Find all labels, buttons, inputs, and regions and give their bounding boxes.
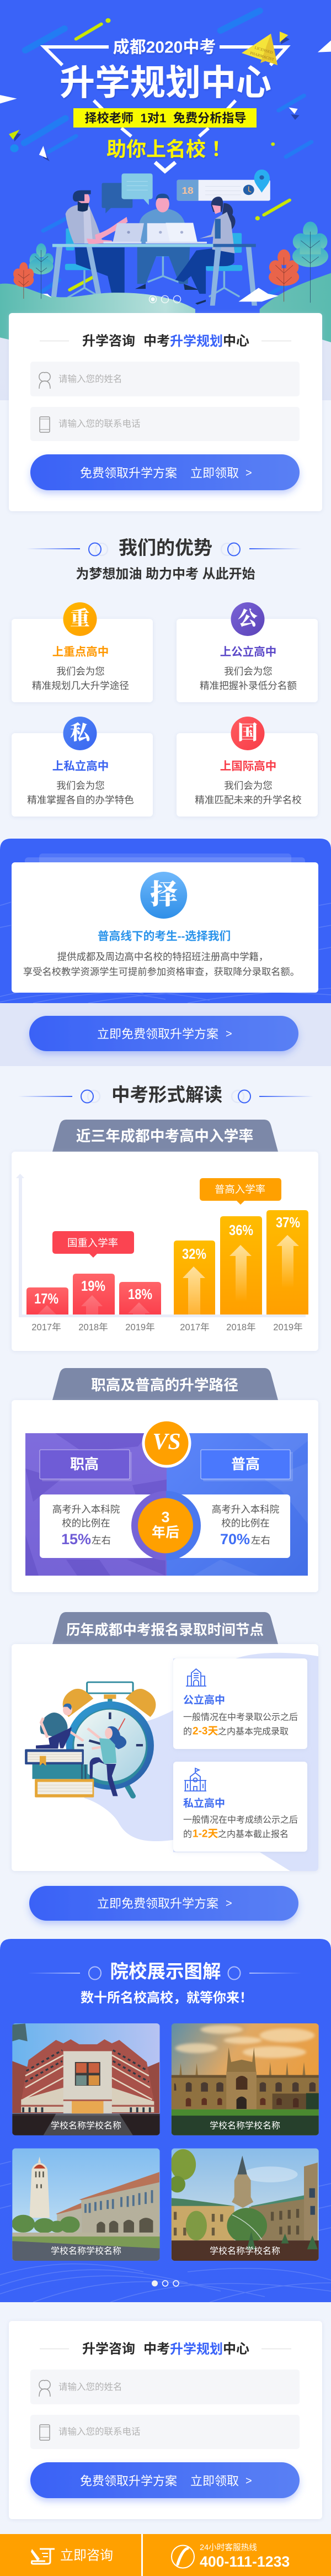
- tab: pathways: [52, 1368, 278, 1400]
- submit button: 立即领取: [190, 466, 239, 480]
- calendar card: [177, 180, 270, 201]
- icon: international: 国: [238, 722, 258, 744]
- panel text: 享受名校教学资源学生可提前参加资格审查，获取降分录取名额。: [23, 966, 300, 977]
- bar: 2018 key 19%: [73, 1274, 115, 1314]
- icon: private: [63, 717, 97, 750]
- vocational side background: [25, 1433, 167, 1576]
- hotline: 24小时客服热线: [200, 2543, 257, 2552]
- card: public high school: [177, 602, 318, 702]
- general result: 70%: [220, 1531, 250, 1547]
- carousel dots: [152, 2280, 179, 2287]
- icon: small plant left: [29, 243, 54, 299]
- submit button: [30, 454, 300, 490]
- submit button: 立即领取: [190, 2474, 239, 2488]
- icon: red plant right: [269, 250, 299, 301]
- card: international high school: 我们会为您: [224, 780, 273, 791]
- card: key high school: 上重点高中: [52, 645, 109, 658]
- card: public admission time: 的: [183, 1727, 192, 1737]
- person: bearded man: [66, 190, 128, 304]
- form heading: 升学咨询: [82, 2342, 135, 2356]
- label: general: 普高: [231, 1456, 260, 1472]
- general result: 校的比例在: [221, 1518, 270, 1529]
- photo: school three: 学校名称学校名称: [51, 2246, 121, 2256]
- icon: big plant right: [292, 221, 328, 303]
- bar: 2019 key 18%: 18%: [128, 1286, 152, 1302]
- name input: [30, 362, 300, 396]
- tab: enrolment rate: [52, 1120, 278, 1152]
- year labels: [31, 1322, 303, 1333]
- name input: [30, 2370, 300, 2404]
- bar: 2017 general 32%: 32%: [182, 1245, 206, 1262]
- card: key high school: 精准规划几大升学途径: [32, 680, 129, 691]
- vocational result: 高考升入本科院: [52, 1504, 120, 1515]
- card: public admission time: 之内基本完成录取: [218, 1727, 289, 1737]
- hero banner: [0, 0, 331, 342]
- button: get plan: 立即免费领取升学方案: [97, 1897, 218, 1910]
- phone input: [30, 407, 300, 441]
- card: private admission time: 一般情况在中考成绩公示之后: [183, 1815, 298, 1825]
- vocational result: 校的比例在: [62, 1518, 110, 1529]
- callout: key rate: [52, 1231, 134, 1258]
- subheading: 为梦想加油 助力中考 从此开始: [76, 566, 255, 582]
- form heading: 中考升学规划中心: [143, 2342, 249, 2356]
- heading: exam analysis: [18, 1085, 313, 1105]
- bar: 2018 general 36%: 36%: [229, 1222, 253, 1238]
- form heading: [82, 333, 249, 349]
- ring and three years later badge: 3: [161, 1509, 170, 1525]
- icon: pencil and scroll: [31, 2549, 55, 2564]
- yellow tagline band: [73, 108, 257, 128]
- books: [25, 1749, 94, 1798]
- icon: key: 重: [70, 607, 90, 629]
- button: get plan: [29, 1886, 298, 1921]
- person: woman: [175, 197, 236, 305]
- year labels: 2019年: [125, 1322, 155, 1333]
- down chevron: [155, 162, 175, 171]
- card: international high school: 精准匹配未来的升学名校: [195, 794, 302, 805]
- hotline: [200, 2543, 290, 2570]
- icon: public school building: [186, 1669, 206, 1686]
- hills: [0, 273, 331, 342]
- panel: below the cutoff: [0, 839, 331, 1003]
- submit button: 免费领取升学方案: [80, 466, 177, 480]
- icon: speech bubbles: [102, 173, 153, 213]
- card: private high school: 上私立高中: [52, 760, 109, 773]
- panel text: [23, 951, 300, 977]
- card: key high school: 我们会为您: [56, 666, 105, 677]
- card: private admission time: 之内基本截止报名: [218, 1830, 289, 1840]
- panel: consultation form repeat: [9, 2321, 322, 2519]
- button: get plan: 立即免费领取升学方案: [97, 1027, 218, 1041]
- card: private high school: 我们会为您: [56, 780, 105, 791]
- year labels: 2018年: [78, 1322, 108, 1333]
- heading: our advantages: [26, 538, 302, 559]
- callout: general rate: [200, 1178, 281, 1205]
- card: private admission time: [173, 1762, 307, 1852]
- ring and three years later badge: [131, 1491, 201, 1560]
- phone input: 请输入您的联系电话: [58, 2426, 140, 2437]
- heading: exam analysis: 中考形式解读: [111, 1085, 222, 1105]
- badge: licensed pharmacist: PHARMACIST: [249, 51, 275, 62]
- phone input: 请输入您的联系电话: [58, 418, 140, 429]
- card: international high school: 上国际高中: [220, 760, 276, 773]
- yellow tagline band: 择校老师 1对1 免费分析指导: [85, 112, 246, 125]
- person: student kneeling: [36, 1704, 83, 1748]
- photo: school four: [169, 2148, 319, 2261]
- panel: pathways comparison: [12, 1400, 318, 1592]
- vocational result: 15%: [61, 1531, 91, 1547]
- photo: school one: 学校名称学校名称: [51, 2121, 121, 2131]
- chart axes: [16, 1174, 306, 1317]
- icon: key: [63, 602, 97, 636]
- ring and three years later badge: 年后: [152, 1525, 179, 1540]
- card: public admission time: 一般情况在中考录取公示之后: [183, 1713, 298, 1722]
- general side background: [167, 1433, 308, 1576]
- card: public admission time: 公立高中: [183, 1694, 225, 1706]
- bar: 2017 key 17%: [26, 1287, 68, 1314]
- label: vocational: 职高: [70, 1456, 99, 1472]
- general result: [174, 1494, 290, 1558]
- bar: 2018 general 36%: [220, 1216, 262, 1314]
- icon: choose: 择: [150, 879, 178, 910]
- icon: red plant left: [13, 262, 34, 299]
- panel heading: 普高线下的考生--选择我们: [98, 930, 231, 943]
- panel: admission timeline: [12, 1644, 318, 1871]
- laptops: [103, 223, 207, 243]
- card: private admission time: 1-2天: [193, 1828, 218, 1840]
- gallery heading: 院校展示图解: [110, 1962, 221, 1982]
- icon: map pin: [254, 169, 270, 193]
- callout: general rate: 普高入学率: [215, 1184, 265, 1195]
- button: get plan: [29, 1016, 298, 1051]
- card: public high school: 精准把握补录低分名额: [200, 680, 297, 691]
- carousel dots: [149, 296, 181, 303]
- label: vocational: [40, 1450, 132, 1481]
- bar: 2019 general 37%: [266, 1210, 308, 1314]
- title frame: [44, 47, 287, 136]
- photo: school two: [172, 2023, 319, 2135]
- illustration: alarm clock and students: [25, 1682, 156, 1798]
- form heading: [82, 2342, 249, 2356]
- bar: 2017 general 32%: [174, 1241, 215, 1314]
- footer bar: [0, 2534, 331, 2576]
- year labels: 2019年: [273, 1322, 303, 1333]
- photo: school three: [12, 2148, 160, 2261]
- card: international high school: [177, 717, 318, 817]
- badge: versus: VS: [152, 1429, 181, 1455]
- general result: 高考升入本科院: [212, 1504, 279, 1515]
- heading: our advantages: 我们的优势: [119, 538, 212, 559]
- card: key high school: [12, 602, 153, 702]
- card: public high school: 我们会为您: [224, 666, 273, 677]
- card: private admission time: 私立高中: [183, 1796, 225, 1810]
- gallery heading: [28, 1962, 302, 1982]
- tab: enrolment rate: 近三年成都中考高中入学率: [76, 1128, 253, 1144]
- submit button: >: [245, 467, 252, 479]
- photo: school four: 学校名称学校名称: [210, 2246, 280, 2256]
- slogan: 助你上名校 ！: [106, 138, 231, 160]
- gallery subheading: 数十所名校高校，就等你来！: [81, 1991, 253, 2005]
- bar: 2017 key 17%: 17%: [34, 1290, 58, 1307]
- card: public admission time: 2-3天: [193, 1726, 218, 1737]
- form heading: 升学咨询: [82, 333, 135, 349]
- heading: city and year: 成都2020中考: [113, 39, 216, 56]
- badge: licensed pharmacist: [242, 34, 277, 65]
- form heading: 中考升学规划中心: [143, 333, 249, 349]
- icon: public: [231, 602, 265, 636]
- name input: 请输入您的姓名: [58, 2382, 122, 2392]
- vocational result: [40, 1494, 158, 1558]
- calendar card: 18: [182, 185, 194, 196]
- decorative streaks: [24, 11, 311, 296]
- badge: licensed pharmacist: LICENSED: [254, 45, 273, 55]
- icon: public: 公: [238, 607, 258, 629]
- bar: 2019 key 18%: [119, 1282, 161, 1314]
- person: girl climbing: [88, 1726, 126, 1796]
- table: [50, 244, 257, 306]
- year labels: 2017年: [180, 1322, 210, 1333]
- card: public high school: 上公立高中: [220, 645, 276, 658]
- photo: school one: [12, 2023, 160, 2135]
- tab: timeline: 历年成都中考报名录取时间节点: [66, 1622, 264, 1638]
- card: private admission time: 的: [183, 1830, 192, 1840]
- panel text: 提供成都及周边高中名校的特招班注册高中学籍，: [57, 951, 268, 962]
- year labels: 2017年: [31, 1322, 61, 1333]
- year labels: 2018年: [226, 1322, 256, 1333]
- phone input: [30, 2415, 300, 2449]
- chairs: [65, 229, 242, 298]
- icon: international: [231, 717, 265, 750]
- icon: telephone: [172, 2545, 194, 2568]
- panel: consultation form: [9, 313, 322, 511]
- main title: 升学规划中心: [60, 63, 271, 103]
- submit button: >: [245, 2475, 252, 2487]
- tab: pathways: 职高及普高的升学路径: [91, 1377, 238, 1393]
- hotline: 400-111-1233: [200, 2553, 290, 2570]
- button: get plan: >: [226, 1028, 232, 1040]
- badge: versus: [143, 1420, 190, 1466]
- label: general: [201, 1450, 293, 1481]
- icon: choose: [140, 872, 187, 919]
- panel: enrolment chart: [12, 1152, 318, 1351]
- callout: key rate: 国重入学率: [67, 1237, 118, 1249]
- icon: private: 私: [70, 722, 92, 744]
- submit button: [30, 2462, 300, 2498]
- photo: school two: 学校名称学校名称: [210, 2121, 280, 2131]
- general result: 左右: [251, 1535, 270, 1546]
- submit button: 免费领取升学方案: [80, 2474, 177, 2488]
- panel: school gallery: [0, 1939, 331, 2302]
- person: man in centre: [135, 194, 200, 290]
- bar: 2019 general 37%: 37%: [276, 1214, 300, 1231]
- card: private high school: 精准掌握各自的办学特色: [27, 794, 134, 805]
- vocational result: 左右: [92, 1535, 111, 1546]
- icon: private school building: [184, 1768, 206, 1791]
- card: public admission time: [173, 1658, 307, 1749]
- bar: 2018 key 19%: 19%: [81, 1278, 105, 1294]
- consult now: 立即咨询: [60, 2548, 113, 2563]
- card: private high school: [12, 717, 153, 817]
- button: get plan: >: [226, 1897, 232, 1910]
- illustration: team meeting: [0, 169, 331, 342]
- tab: timeline: [52, 1612, 278, 1644]
- name input: 请输入您的姓名: [58, 374, 122, 384]
